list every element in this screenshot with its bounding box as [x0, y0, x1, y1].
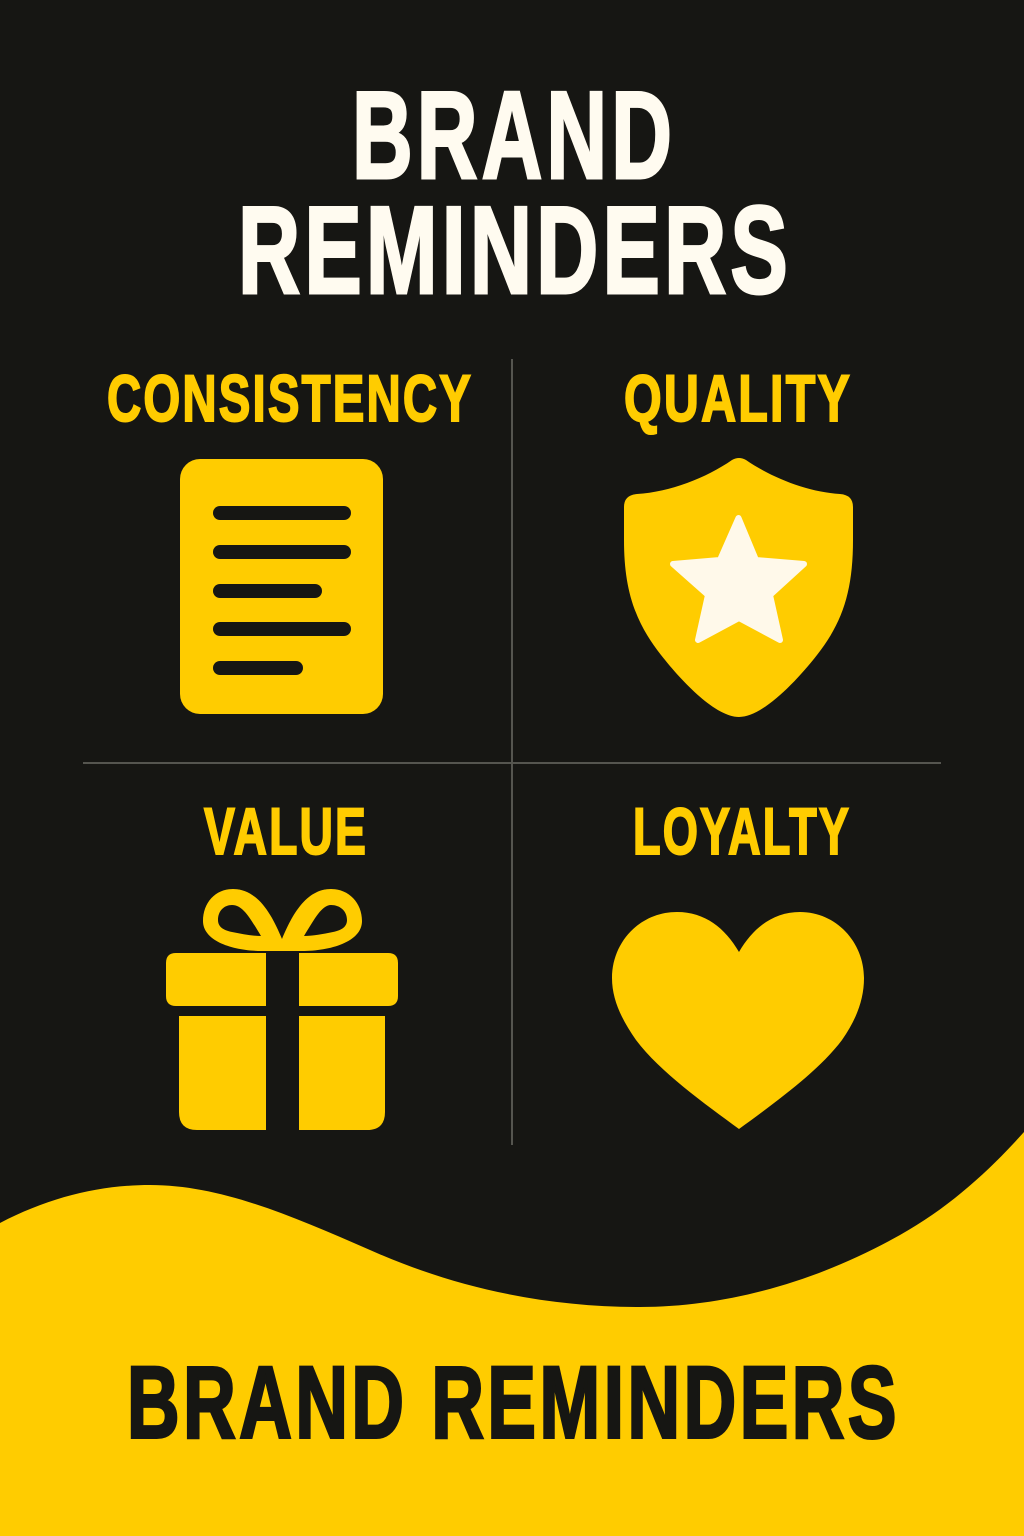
title — [238, 67, 792, 320]
icon: gift box — [166, 889, 398, 1130]
panel: value — [166, 794, 398, 1130]
panel: loyalty — [612, 794, 864, 1129]
title: REMINDERS — [238, 182, 792, 320]
heading: loyalty: LOYALTY — [633, 794, 851, 868]
title: BRAND — [352, 67, 676, 205]
heading: quality: QUALITY — [624, 361, 852, 435]
heading: value: VALUE — [204, 794, 368, 868]
heading: consistency: CONSISTENCY — [107, 361, 473, 435]
icon: shield with star — [624, 458, 853, 717]
icon: document — [180, 459, 383, 714]
panel: quality — [624, 361, 853, 717]
footer wave banner — [0, 1132, 1024, 1536]
icon: heart — [612, 912, 864, 1129]
panel: consistency — [107, 361, 473, 714]
